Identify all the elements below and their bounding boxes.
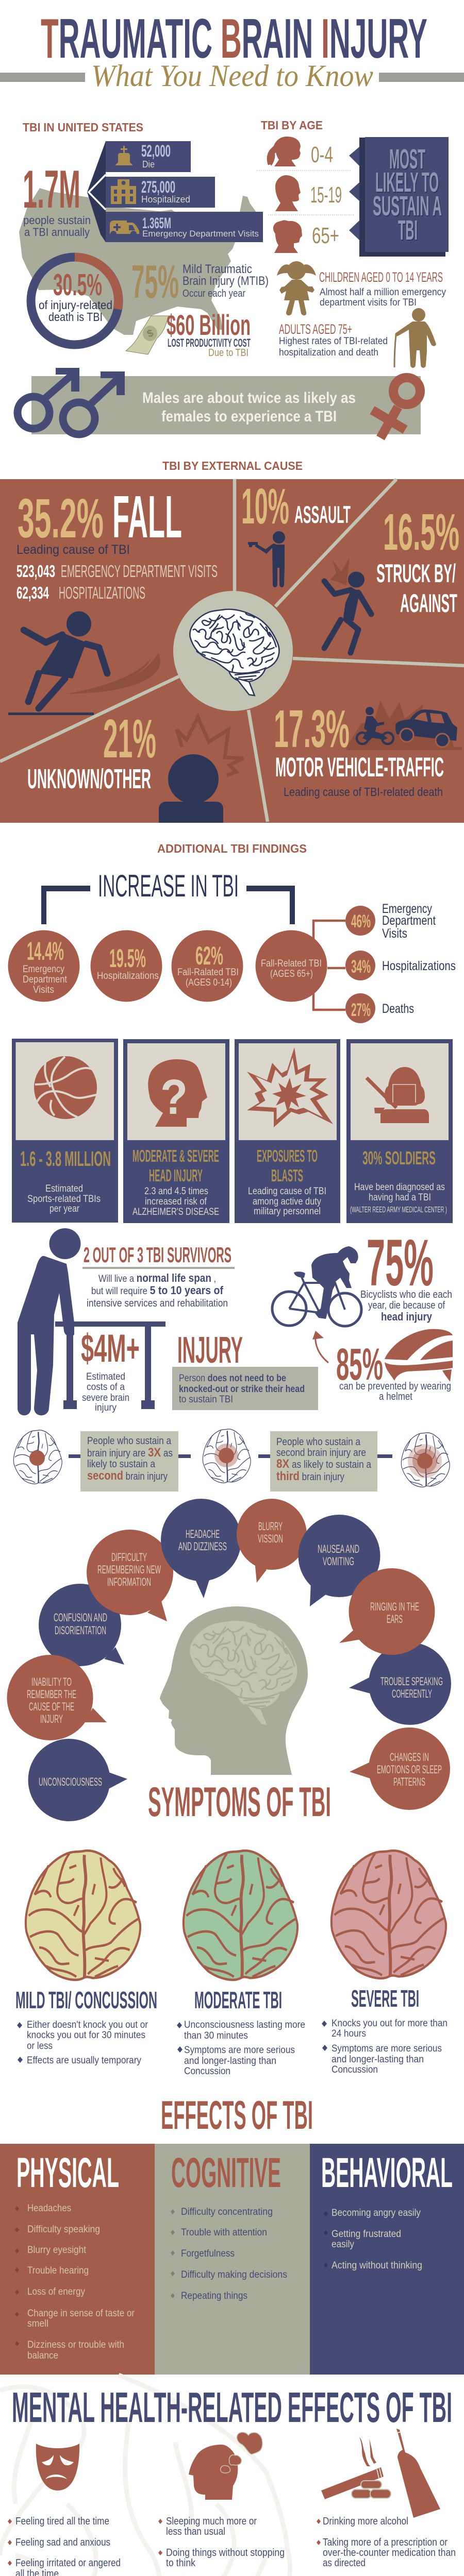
circle: ER visits: Visits — [33, 985, 54, 995]
circle: ER visits: 14.4% — [27, 937, 64, 965]
stat: $60 billion: $60 Billion — [167, 309, 251, 341]
bullets: knocks you out for 30 minutes — [27, 2030, 145, 2041]
stat box: hospitalized — [106, 177, 215, 208]
text: $4M+: $4M+ — [81, 1327, 140, 1370]
sub-stat: 34%: 34% — [351, 957, 371, 977]
circle: fall-related ages 0-14 — [171, 930, 243, 1002]
panel: TBI in United States — [19, 121, 269, 359]
heading: by external cause: TBI BY EXTERNAL CAUSE — [162, 459, 303, 472]
bubble: ringing in the ears — [339, 1568, 435, 1655]
circle: fall-related ages 65+: Fall-Related TBI — [261, 958, 322, 969]
text: adults: Highest rates of TBI-related — [279, 336, 388, 347]
bubble: trouble speaking — [349, 1642, 451, 1725]
connector fold — [87, 141, 106, 242]
age: 15-19: 15-19 — [310, 182, 342, 208]
panel: behavioral effects: Getting frustrated — [332, 2229, 401, 2240]
icon: head with question mark: ? — [160, 1070, 188, 1125]
bullets: Symptoms are more serious — [332, 2043, 442, 2054]
panel: external causes — [0, 478, 464, 823]
bullets: column 1 — [8, 2516, 121, 2576]
bullets: Knocks you out for more than — [332, 2018, 448, 2029]
icon: red brain — [332, 1851, 446, 1978]
text box: second injury: People who sustain a — [87, 1435, 172, 1447]
heading: MILD TBI/ CONCUSSION — [15, 1987, 157, 2013]
bubble: unconsciousness: UNCONSCIOUSNESS — [39, 1775, 102, 1788]
bubble: headache — [161, 1499, 241, 1598]
bullets: column 1: Feeling sad and anxious — [15, 2537, 110, 2548]
bullets: 24 hours — [332, 2028, 366, 2039]
fall: figure — [8, 611, 160, 715]
card: blasts: among active duty — [253, 1196, 321, 1207]
bubble: unconsciousness — [28, 1739, 127, 1821]
bubble: inability to remember: INABILITY TO — [31, 1675, 72, 1688]
sub-stat: 46%: Visits — [382, 926, 407, 941]
text: adults: ADULTS AGED 75+ — [279, 321, 352, 337]
text: adults: hospitalization and death — [279, 347, 378, 358]
panel: cognitive effects: Difficulty making decisions — [181, 2269, 287, 2280]
text: injury: INJURY — [177, 1330, 243, 1371]
icon: brain with single spot — [13, 1430, 62, 1484]
text: children: department visits for TBI — [320, 297, 417, 308]
text: adults — [279, 321, 388, 358]
divider — [268, 214, 354, 215]
circle: ER visits: Emergency — [23, 964, 64, 975]
panel: increase in TBI — [8, 869, 456, 1023]
text box: second injury — [80, 1431, 178, 1492]
sub-stat: 46%: 46% — [351, 911, 371, 931]
bullets: and longer-lasting than — [184, 2056, 276, 2066]
fall: stats: EMERGENCY DEPARTMENT VISITS — [61, 562, 218, 581]
unknown/other: UNKNOWN/OTHER — [27, 764, 151, 794]
panel: cognitive effects: Forgetfulness — [181, 2248, 235, 2259]
sub-stat: 46%: Department — [382, 913, 436, 928]
panel: cognitive effects: Trouble with attention — [181, 2227, 267, 2238]
bubble: nausea: NAUSEA AND — [318, 1543, 359, 1555]
motor vehicle — [274, 699, 462, 799]
struck by — [324, 503, 459, 653]
bullets: column 2 — [158, 2516, 303, 2576]
icon: head with question mark — [148, 1059, 207, 1127]
stat: 75% bicyclists: Bicyclists who die each — [360, 1289, 452, 1300]
circle: fall-related ages 65+: (AGES 65+) — [270, 969, 313, 979]
callout: most likely to sustain a TBI: TBI — [398, 215, 418, 246]
icon: senior head — [273, 220, 302, 253]
assault: 10% — [241, 478, 289, 534]
icon: basketball — [34, 1056, 97, 1119]
text: 2 out of 3 survivors — [82, 1243, 235, 1309]
motor vehicle: Leading cause of TBI-related death — [284, 785, 443, 799]
card: sports: per year — [49, 1204, 80, 1214]
bullets — [322, 2018, 448, 2075]
bubble: headache: HEADACHE — [186, 1528, 220, 1540]
age: 65+: 65+ — [312, 223, 339, 248]
bullets: Either doesn't knock you out or — [27, 2020, 148, 2030]
icon: ambulance — [110, 221, 139, 234]
card: sports: Sports-related TBIs — [27, 1194, 101, 1205]
card: blasts: EXPOSURES TO — [257, 1146, 318, 1165]
bracket — [41, 886, 295, 924]
stat box: ER visits: 1.365M — [142, 215, 171, 232]
text: $4M+: costs of a — [87, 1382, 125, 1393]
subtitle bar left — [0, 73, 85, 82]
icon: cigar, pills and bottle — [321, 2429, 440, 2518]
stat: 75% bicyclists: head injury — [381, 1310, 433, 1323]
icon: male symbol 1 — [18, 368, 79, 429]
icon: helmet — [385, 1329, 453, 1382]
stat box: deaths: 52,000 — [141, 142, 171, 160]
unknown/other: 21% — [103, 708, 156, 769]
stat: $60 billion: Due to TBI — [208, 347, 248, 359]
panel: TBI in United States: 1.7M — [23, 160, 80, 219]
unknown/other — [27, 708, 243, 823]
panel: physical effects: Headaches — [27, 2203, 71, 2214]
icon: teen head — [275, 175, 301, 211]
panel: external causes: ASSAULT — [294, 501, 351, 528]
fall: stats: 523,043 — [16, 562, 55, 581]
bullets: column 2: Sleeping much more or — [166, 2516, 257, 2527]
icon: impact burst — [330, 557, 350, 586]
text: injury: Person does not need to be — [179, 1373, 286, 1384]
card: head injury — [123, 1039, 229, 1223]
bullets: Unconsciousness lasting more — [184, 2020, 305, 2030]
circle: fall-related ages 0-14: (AGES 0-14) — [186, 977, 232, 988]
panel: physical effects: balance — [27, 2350, 58, 2361]
bubble: difficulty remembering: INFORMATION — [107, 1575, 151, 1588]
icon: brain with halo — [203, 1429, 251, 1483]
card: soldiers: having had a TBI — [369, 1192, 431, 1203]
bullets: and longer-lasting than — [332, 2054, 424, 2065]
donut chart: 30.5%: of injury-related — [39, 298, 112, 312]
stat caption: people sustain — [23, 214, 91, 227]
text: injury: to sustain TBI — [179, 1394, 233, 1405]
bullets — [177, 2020, 305, 2077]
panel: TBI by age — [257, 118, 449, 368]
heading: additional findings: ADDITIONAL TBI FINDINGS — [157, 842, 307, 855]
panel: physical effects: PHYSICAL — [16, 2149, 119, 2196]
heading: TBI IN UNITED STATES — [23, 121, 143, 134]
text: 2 out of 3 survivors: but will require 5 to 10 years of — [91, 1284, 224, 1297]
bullets: column 3: Taking more of a prescription or — [323, 2537, 448, 2548]
text: 2 out of 3 survivors: 2 OUT OF 3 TBI SURVIVORS — [84, 1243, 231, 1267]
sub-stat: 46% — [345, 902, 436, 941]
bubble: inability to remember: INJURY — [40, 1713, 63, 1725]
bubble: nausea: VOMITING — [323, 1555, 354, 1568]
donut chart: 30.5%: death is TBI — [48, 310, 103, 324]
icon: bicyclist — [272, 1246, 361, 1326]
subtitle: What You Need to Know — [91, 59, 373, 93]
text box: third injury: 8X as likely to sustain a — [276, 1457, 372, 1471]
watermark brain — [0, 2375, 290, 2576]
text box: third injury: second brain injury are — [276, 1447, 366, 1459]
text box: second injury: likely to sustain a — [87, 1459, 156, 1470]
card: head injury: 2.3 and 4.5 times — [144, 1186, 208, 1197]
card: blasts: Leading cause of TBI — [248, 1186, 326, 1197]
text: injury — [172, 1330, 318, 1410]
heading: INCREASE IN TBI — [98, 869, 239, 903]
heading: TBI BY AGE — [261, 118, 323, 132]
icon: elderly man with cane — [394, 308, 436, 368]
bubble: confusion: DISORIENTATION — [55, 1624, 106, 1637]
stat: 75% mild TBI: Brain Injury (MTIB) — [183, 274, 269, 288]
icon: burst outline — [177, 717, 243, 775]
text: $4M+ — [81, 1327, 140, 1413]
sub-stat: 27%: Deaths — [382, 1002, 414, 1016]
fall: stats — [16, 483, 218, 602]
bubble: inability to remember — [7, 1655, 107, 1740]
text: 2 out of 3 survivors: intensive services and rehabilitation — [87, 1298, 228, 1309]
circle: hospitalizations: Hospitalizations — [97, 971, 159, 981]
card: soldiers — [346, 1039, 453, 1223]
stat caption: a TBI annually — [24, 226, 90, 239]
text box: third injury — [270, 1431, 377, 1492]
icon: crash burst — [346, 701, 462, 750]
icon: struck figure — [324, 572, 371, 653]
bubble: headache: AND DIZZINESS — [178, 1540, 227, 1553]
panel: cognitive effects: COGNITIVE — [171, 2149, 281, 2196]
card: head injury: ALZHEIMER'S DISEASE — [132, 1207, 219, 1217]
bubble: blurry vision — [237, 1499, 307, 1583]
bubble: changes in emotions: PATTERNS — [393, 1775, 425, 1788]
text: 2 out of 3 survivors: Will live a normal life span , — [98, 1272, 216, 1284]
panel: severe TBI — [322, 1851, 448, 2075]
bubble: difficulty remembering: REMEMBERING NEW — [97, 1563, 161, 1576]
card: sports — [12, 1039, 118, 1223]
panel: behavioral effects: easily — [332, 2239, 354, 2250]
header — [0, 7, 464, 93]
icon: green brain — [184, 1851, 297, 1980]
panel: physical effects: Blurry eyesight — [27, 2245, 87, 2256]
bubble: blurry vision: BLURRY — [258, 1520, 283, 1533]
stat: 75% mild TBI: Mild Traumatic — [183, 262, 252, 276]
icon: dollar bill: $ — [145, 327, 155, 340]
donut chart: 30.5%: 30.5% — [53, 268, 102, 302]
circle: fall-related ages 0-14: 62% — [195, 941, 223, 970]
panel: physical effects — [0, 2144, 155, 2375]
icon: man at table — [18, 1228, 80, 1415]
bubble: inability to remember: REMEMBER THE — [27, 1688, 76, 1701]
bubble: changes in emotions — [350, 1727, 450, 1810]
stat box: hospitalized: 275,000 — [141, 178, 175, 196]
bubble: difficulty remembering — [87, 1530, 173, 1621]
fall: stats: FALL — [112, 483, 182, 550]
bubble: changes in emotions: CHANGES IN — [390, 1751, 429, 1764]
stat: $60 billion: LOST PRODUCTIVITY COST — [168, 336, 251, 349]
bullets: Concussion — [332, 2064, 378, 2075]
donut chart: 30.5% — [31, 257, 119, 345]
motor vehicle: 17.3% — [274, 699, 350, 758]
card: head injury: increased risk of — [145, 1196, 207, 1207]
callout: most likely to sustain a TBI — [349, 137, 449, 257]
icon: assault figure — [248, 531, 285, 587]
icon: motorcycle — [357, 707, 393, 744]
text box: third injury: People who sustain a — [276, 1436, 361, 1448]
panel: behavioral effects — [310, 2144, 464, 2375]
icon: car — [395, 709, 457, 747]
icon: dollar bill — [126, 316, 169, 354]
sub-stat: 27%: 27% — [351, 1000, 371, 1020]
text: children: Almost half a million emergency — [320, 287, 446, 298]
arrow — [312, 1331, 328, 1363]
stat: 75% bicyclists: year, die because of — [368, 1300, 445, 1311]
text box: second injury: brain injury are 3X as — [87, 1446, 173, 1460]
panel: survivors — [18, 1226, 453, 1415]
subtitle bar right — [379, 73, 464, 82]
US map — [19, 188, 263, 335]
stat: 75% mild TBI — [131, 256, 269, 308]
panel: gender banner — [18, 368, 421, 438]
bullets: column 3: as directed — [323, 2557, 366, 2569]
stat box: deaths: Die — [142, 159, 155, 170]
assault — [241, 478, 351, 587]
bullets: Concussion — [184, 2066, 230, 2077]
card: head injury: MODERATE & SEVERE — [132, 1146, 219, 1165]
text: injury: knocked-out or strike their head — [179, 1384, 305, 1395]
bullets: Symptoms are more serious — [184, 2045, 295, 2056]
bullets: column 2: to think — [166, 2557, 196, 2569]
bubble: difficulty remembering: DIFFICULTY — [111, 1551, 147, 1564]
circle: ER visits — [8, 930, 79, 1002]
stat: 85% helmet — [336, 1329, 453, 1402]
circle: fall-related ages 0-14: Fall-Ralated TBI — [177, 967, 239, 978]
panel: moderate TBI — [177, 1851, 305, 2077]
sub-stat: 46%: Emergency — [382, 902, 432, 916]
sub-stat: 34% — [345, 951, 456, 980]
panel: mental health effects — [8, 2383, 456, 2576]
stat caption — [23, 214, 91, 239]
center brain — [173, 591, 293, 711]
banner text — [142, 389, 356, 425]
panel: behavioral effects: Becoming angry easily — [332, 2208, 421, 2218]
bubble: ringing in the ears: RINGING IN THE — [370, 1600, 419, 1613]
icon: yellow brain — [26, 1851, 140, 1980]
icon: girl — [277, 261, 316, 315]
bubble: confusion: CONFUSION AND — [54, 1611, 107, 1624]
banner text: Males are about twice as likely as — [142, 389, 356, 406]
fall: stats: Leading cause of TBI — [16, 543, 130, 557]
icon: brain with double halo — [401, 1433, 450, 1487]
card: sports: Estimated — [45, 1183, 83, 1194]
text: $4M+: injury — [95, 1402, 117, 1413]
card: head injury: HEAD INJURY — [149, 1166, 203, 1185]
icon: male symbol 2 — [63, 371, 125, 434]
sub-stat: 27% — [345, 993, 414, 1023]
bullets: Effects are usually temporary — [27, 2055, 141, 2066]
panel: physical effects: smell — [27, 2318, 48, 2329]
card: sports: 1.6 - 3.8 MILLION — [20, 1147, 111, 1171]
card: soldiers: Have been diagnosed as — [354, 1182, 445, 1193]
icon: female symbol — [372, 378, 420, 438]
stat: 75% mild TBI: 75% — [131, 256, 179, 308]
stat: 75% mild TBI: Occur each year — [183, 288, 245, 299]
text: $4M+: Estimated — [86, 1371, 125, 1382]
circle: ER visits: Department — [23, 974, 68, 985]
bubble: inability to remember: CAUSE OF THE — [29, 1700, 74, 1713]
banner text: females to experience a TBI — [161, 408, 337, 425]
bubble: confusion — [39, 1584, 124, 1666]
circle: fall-related ages 65+ — [256, 930, 327, 1002]
divider — [257, 170, 351, 171]
icon: soldier — [367, 1067, 429, 1123]
bullets: column 2: less than usual — [166, 2526, 225, 2537]
panel: physical effects: Change in sense of taste or — [27, 2308, 135, 2319]
age: 0-4: 0-4 — [311, 142, 333, 167]
icon: explosion — [247, 1047, 333, 1127]
panel: physical effects: Trouble hearing — [27, 2265, 89, 2276]
panel: cognitive effects: Repeating things — [181, 2291, 247, 2301]
fall: stats: HOSPITALIZATIONS — [59, 583, 145, 602]
icon: table — [55, 1321, 165, 1409]
stat: 75% bicyclists — [360, 1226, 452, 1323]
icon: gravestone — [115, 146, 133, 165]
panel: mild TBI — [15, 1851, 157, 2066]
icon: child head — [267, 137, 301, 166]
panel: behavioral effects: Acting without thinking — [332, 2260, 422, 2271]
panel: repeat injury chain — [13, 1429, 450, 1492]
stat: $60 billion — [167, 309, 251, 359]
panel: physical effects: Dizziness or trouble with — [27, 2340, 124, 2350]
bullets: column 3: Drinking more alcohol — [323, 2516, 408, 2527]
stat box: deaths — [106, 141, 191, 172]
stat box: ER visits: Emergency Department Visits — [142, 229, 259, 239]
card: blasts — [235, 1039, 340, 1223]
bullets: column 2: Doing things without stopping — [166, 2547, 285, 2558]
stat box: hospitalized: Hospitalized — [141, 194, 190, 205]
panel: moderate TBI: MODERATE TBI — [194, 1987, 282, 2013]
icon: sad mask — [36, 2444, 79, 2490]
stat: 85% helmet: a helmet — [379, 1391, 412, 1402]
card: blasts: military personnel — [254, 1206, 321, 1217]
panel: physical effects: Difficulty speaking — [27, 2224, 100, 2235]
callout: most likely to sustain a TBI: TBI — [399, 216, 419, 247]
circle: hospitalizations: 19.5% — [109, 944, 146, 973]
bubble: ringing in the ears: EARS — [387, 1613, 403, 1625]
bullets: column 3 — [317, 2516, 456, 2576]
panel: cognitive effects: Difficulty concentrating — [181, 2207, 273, 2217]
connector chevron — [89, 175, 106, 210]
text box: third injury: third brain injury — [276, 1469, 344, 1483]
bullets: column 1: Feeling irritated or angered — [15, 2557, 121, 2569]
stat: 85% helmet: 85% — [336, 1340, 383, 1389]
panel: physical effects: Loss of energy — [27, 2286, 85, 2297]
bullets — [17, 2020, 148, 2066]
fall: stats: 62,334 — [16, 583, 49, 602]
icon: person silhouette — [159, 754, 223, 823]
text: $4M+: severe brain — [82, 1393, 129, 1403]
icon: hospital — [111, 179, 136, 204]
icon: head with brain — [160, 1606, 308, 1775]
bubble: blurry vision: VISSION — [258, 1532, 283, 1545]
card: blasts: BLASTS — [271, 1166, 303, 1185]
bullets: than 30 minutes — [184, 2030, 248, 2041]
bubble: nausea — [298, 1515, 380, 1606]
text: children — [319, 269, 446, 308]
fall: stats: 35.2% — [18, 487, 104, 549]
connectors — [313, 921, 345, 1010]
panel: symptoms of TBI — [7, 1499, 451, 1825]
bullets: or less — [27, 2041, 53, 2052]
bullets: column 1: Feeling tired all the time — [15, 2516, 109, 2527]
panel: cognitive effects — [155, 2144, 310, 2375]
icon: head with clouds — [189, 2432, 262, 2500]
circle: hospitalizations — [91, 930, 162, 1002]
text box: second injury: second brain injury — [87, 1469, 168, 1483]
stat box: ER visits — [106, 212, 263, 242]
